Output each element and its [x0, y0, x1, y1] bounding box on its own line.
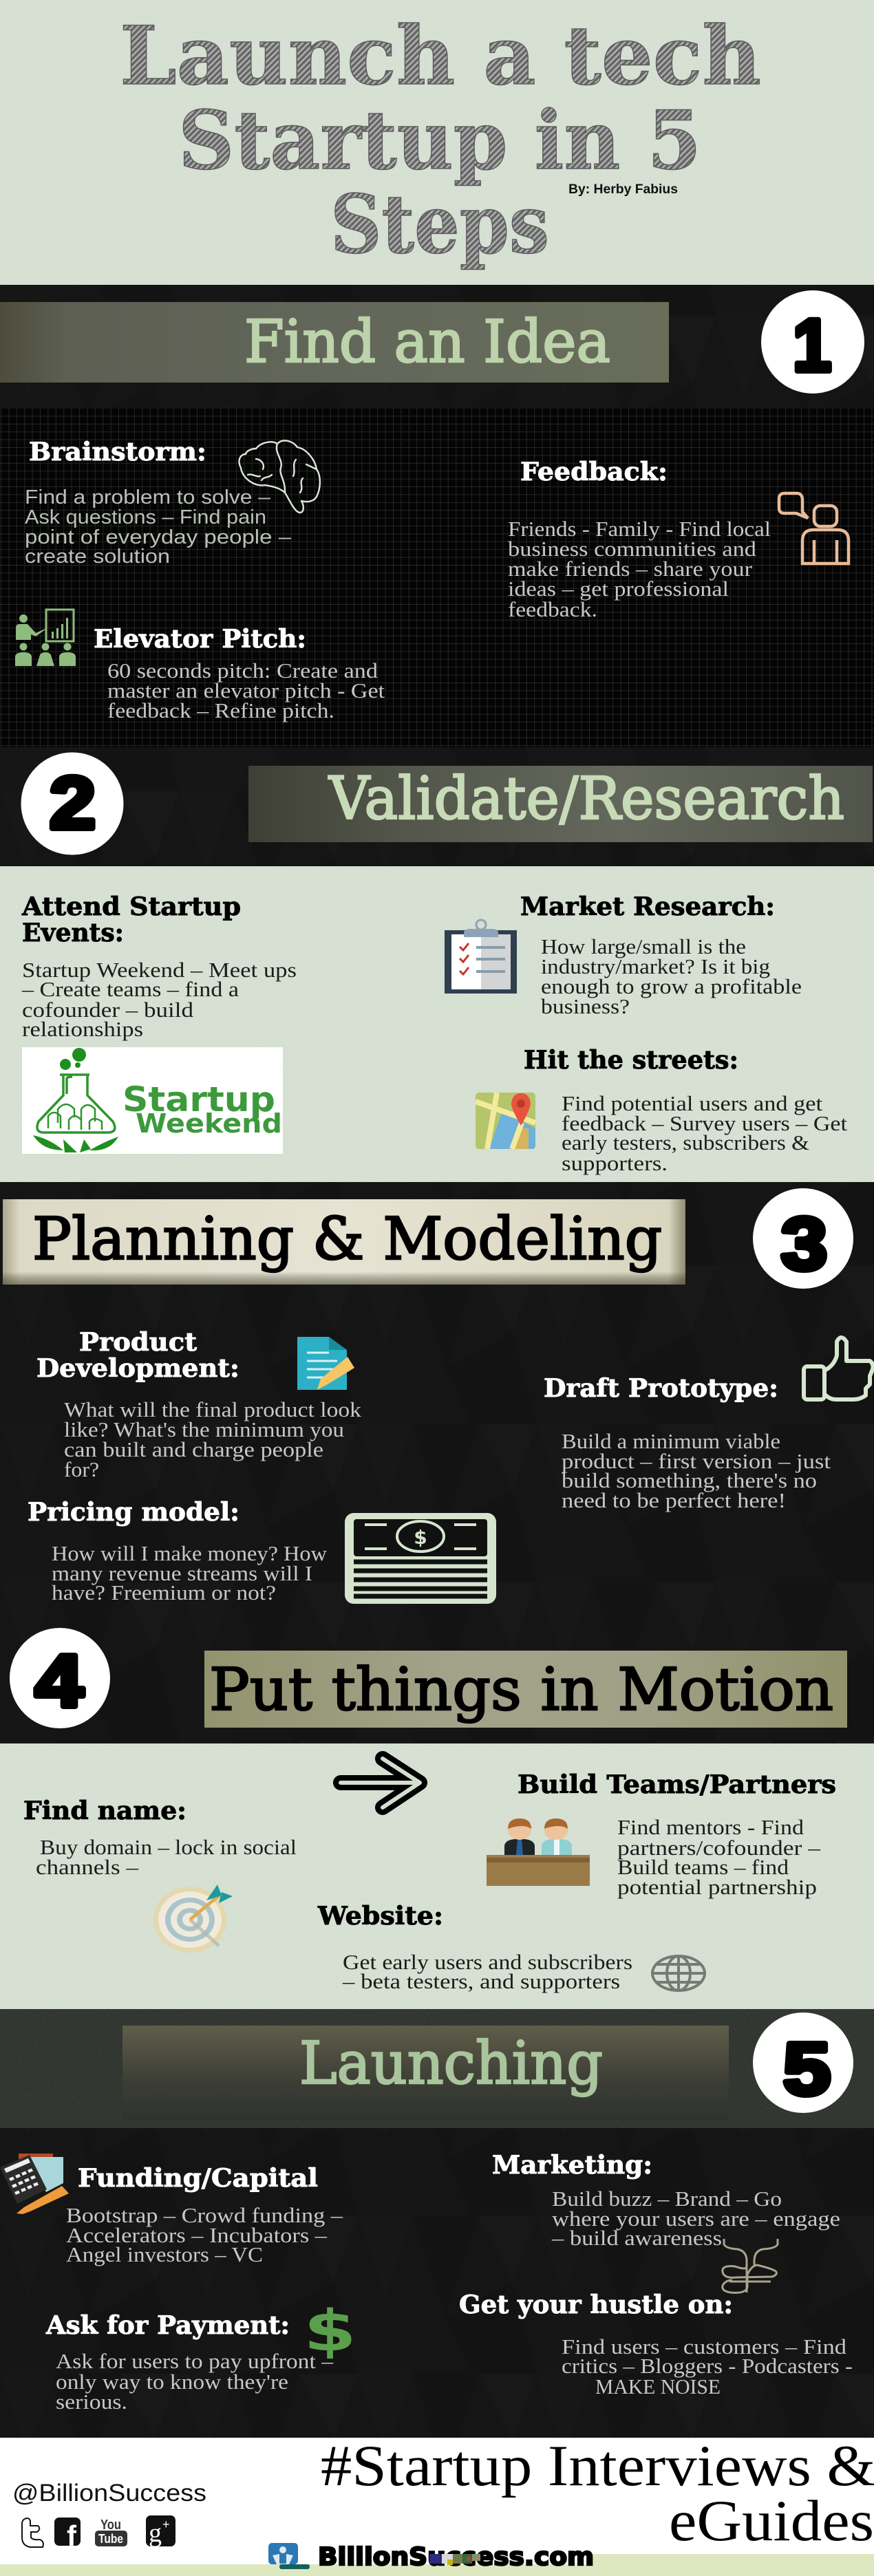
block: funding/capital: Bootstrap – Crowd funding –	[66, 2203, 343, 2227]
icon: facebook	[54, 2518, 81, 2552]
block: get your hustle on: critics – Bloggers - Podcasters -	[562, 2354, 853, 2378]
block: marketing	[492, 2151, 840, 2250]
icon: person with speech bubble	[779, 493, 849, 564]
banner: find an idea	[0, 302, 669, 383]
logo: billionsuccess.com: BillionSuccess.com	[318, 2543, 594, 2571]
icon: document with pencil	[297, 1337, 354, 1390]
title: Startup in 5	[178, 93, 701, 188]
block: find name: Buy domain – lock in social	[40, 1835, 297, 1859]
block: product development: Product	[79, 1328, 197, 1357]
icon: facebook: f	[67, 2520, 77, 2552]
block: feedback: ideas – get professional	[508, 577, 729, 601]
panel: footer	[0, 2434, 874, 2576]
icon: map pin	[476, 1093, 535, 1149]
block: find name	[23, 1796, 297, 1879]
block: pricing model: How will I make money? How	[52, 1541, 328, 1565]
icon: thumbs up	[804, 1338, 873, 1399]
block: attend startup events: Startup Weekend – Meet ups	[22, 958, 297, 982]
logo: startup weekend: Startup	[122, 1080, 275, 1119]
banner: validate/research: Validate/Research	[328, 765, 844, 833]
block: product development: can built and charge people	[64, 1437, 323, 1461]
block: funding/capital: Funding/Capital	[78, 2164, 318, 2193]
arrow	[341, 1759, 420, 1807]
title: Steps	[330, 177, 549, 272]
panel: step 1 header	[0, 285, 874, 409]
block: product development: Development:	[36, 1354, 239, 1383]
block: elevator pitch: Elevator Pitch:	[94, 625, 306, 654]
block: attend startup events: Attend Startup	[21, 892, 241, 921]
number badge 4	[10, 1628, 110, 1728]
panel: step 4 content	[0, 1743, 874, 2009]
block: marketing: Marketing:	[492, 2151, 652, 2180]
block: marketing: – build awareness	[551, 2226, 722, 2250]
panel: step 2 content	[0, 866, 874, 1182]
block: market research: How large/small is the	[541, 934, 746, 958]
block: feedback: feedback.	[508, 597, 597, 621]
block: funding/capital: Angel investors – VC	[66, 2242, 263, 2266]
block: find name: channels –	[36, 1855, 139, 1879]
block: website	[317, 1902, 632, 1993]
number badge 5	[753, 2012, 853, 2113]
icon: stack of money: $	[414, 1526, 427, 1549]
icon: tangled path	[723, 2239, 778, 2293]
block: draft prototype: product – first version – just	[562, 1449, 831, 1473]
block: market research: Market Research:	[520, 892, 775, 921]
block: brainstorm: Ask questions – Find pain	[25, 506, 266, 528]
banner: put things in motion: Put things in Motion	[209, 1656, 833, 1724]
block: hit the streets: early testers, subscribers &	[562, 1130, 809, 1155]
block: market research	[520, 892, 802, 1018]
icon: stack of money	[345, 1513, 496, 1604]
block: build teams/partners: Build teams – find	[617, 1855, 789, 1879]
block: find name: Find name:	[23, 1796, 186, 1825]
banner: launching	[122, 2026, 729, 2120]
block: ask for payment: Ask for Payment:	[45, 2311, 290, 2340]
block: feedback: make friends – share your	[508, 557, 753, 581]
number badge 1: 1	[793, 303, 831, 387]
block: brainstorm: Brainstorm:	[29, 438, 206, 466]
icon: twitter	[22, 2518, 43, 2547]
block: get your hustle on	[459, 2290, 853, 2398]
block: brainstorm	[25, 438, 292, 568]
number badge 1	[761, 290, 864, 394]
icon: globe	[652, 1956, 705, 1990]
block: product development: like? What's the minimum you	[64, 1417, 344, 1441]
block: website: Get early users and subscribers	[343, 1950, 632, 1974]
title	[120, 8, 761, 272]
block: draft prototype	[544, 1374, 831, 1512]
icon: youtube: You	[100, 2518, 121, 2533]
block: feedback: business communities and	[508, 537, 757, 561]
banner: find an idea: Find an Idea	[244, 308, 610, 376]
block: attend startup events: cofounder – build	[22, 998, 194, 1022]
icon: brain	[239, 440, 320, 513]
block: funding/capital: Accelerators – Incubators –	[66, 2223, 328, 2247]
panel: step 3 and step 4 header background	[0, 1182, 874, 1743]
block: market research: enough to grow a profitable	[541, 974, 802, 998]
icon: target with dart	[153, 1885, 233, 1953]
block: get your hustle on: MAKE NOISE	[595, 2374, 721, 2398]
number badge 3: 3	[781, 1202, 827, 1285]
block: feedback: Feedback:	[520, 458, 668, 486]
call to action	[321, 2434, 874, 2553]
block: hit the streets: feedback – Survey users – Get	[562, 1111, 847, 1135]
block: ask for payment	[45, 2311, 334, 2414]
icon: dollar sign: $	[303, 2299, 356, 2364]
block: ask for payment: Ask for users to pay upfront –	[56, 2349, 334, 2373]
block: brainstorm: Find a problem to solve –	[25, 486, 271, 508]
banner: launching: Launching	[299, 2030, 603, 2098]
icon: calculator and notebook	[0, 2154, 69, 2214]
block: feedback	[508, 458, 771, 621]
block: brainstorm: create solution	[25, 546, 170, 568]
number badge 3	[753, 1188, 853, 1289]
block: ask for payment: serious.	[56, 2390, 127, 2414]
icon: youtube: Tube	[98, 2532, 123, 2546]
panel: step 5 header	[0, 2009, 874, 2128]
call to action: #Startup Interviews &	[321, 2434, 874, 2498]
panel: title band	[0, 0, 874, 285]
title: Launch a tech	[120, 8, 761, 103]
block: pricing model	[28, 1498, 328, 1604]
block: build teams/partners: partners/cofounder –	[617, 1836, 821, 1860]
block: attend startup events	[21, 892, 297, 1041]
block: get your hustle on: Get your hustle on:	[459, 2290, 733, 2319]
block: product development	[36, 1328, 362, 1481]
number badge 5: 5	[783, 2027, 831, 2110]
icon: youtube	[95, 2518, 127, 2546]
icon: google plus: g	[149, 2519, 162, 2548]
block: hit the streets: Hit the streets:	[524, 1046, 738, 1075]
block: market research: business?	[541, 994, 630, 1018]
block: build teams/partners: Find mentors - Find	[617, 1815, 804, 1839]
block: pricing model: have? Freemium or not?	[52, 1580, 276, 1604]
social handle: @BillionSuccess	[12, 2480, 206, 2507]
panel: step 5 content	[0, 2128, 874, 2438]
block: draft prototype: need to be perfect here!	[562, 1488, 786, 1512]
block: build teams/partners: Build Teams/Partners	[518, 1770, 836, 1799]
block: elevator pitch: master an elevator pitch - Get	[107, 678, 385, 702]
icon: two people at desk	[487, 1818, 590, 1886]
block: get your hustle on: Find users – customers – Find	[562, 2334, 847, 2359]
logo: startup weekend: Weekend	[136, 1108, 282, 1139]
block: ask for payment: only way to know they're	[56, 2370, 288, 2394]
block: draft prototype: Draft Prototype:	[544, 1374, 778, 1403]
block: draft prototype: Build a minimum viable	[562, 1429, 780, 1453]
block: hit the streets	[524, 1046, 847, 1175]
block: website: Website:	[317, 1902, 443, 1931]
block: attend startup events: Events:	[22, 919, 124, 947]
block: attend startup events: relationships	[22, 1017, 143, 1041]
block: brainstorm: point of everyday people –	[25, 526, 292, 548]
number badge 4: 4	[35, 1639, 83, 1722]
block: product development: for?	[64, 1457, 99, 1481]
block: funding/capital	[66, 2164, 343, 2266]
block: draft prototype: build something, there's no	[562, 1468, 817, 1492]
block: build teams/partners	[518, 1770, 836, 1899]
block: attend startup events: – Create teams – find a	[21, 977, 239, 1001]
icon: presenter with audience	[15, 610, 76, 666]
byline: By: Herby Fabius	[568, 182, 678, 197]
logo: startup weekend	[22, 1047, 283, 1154]
block: marketing: Build buzz – Brand – Go	[552, 2187, 782, 2211]
block: website: – beta testers, and supporters	[342, 1969, 620, 1993]
banner: planning and modeling: Planning & Modeling	[32, 1205, 662, 1274]
icon: google plus	[146, 2515, 175, 2548]
block: pricing model: Pricing model:	[28, 1498, 239, 1527]
block: feedback: Friends - Family - Find local	[508, 517, 771, 541]
block: build teams/partners: potential partnership	[617, 1875, 817, 1899]
block: marketing: where your users are – engage	[552, 2207, 840, 2231]
block: elevator pitch	[94, 625, 385, 722]
block: product development: What will the final product look	[64, 1397, 362, 1421]
block: hit the streets: Find potential users and get	[562, 1091, 822, 1115]
block: hit the streets: supporters.	[562, 1151, 668, 1175]
block: pricing model: many revenue streams will I	[52, 1561, 312, 1585]
call to action: eGuides	[669, 2489, 874, 2553]
panel: step 1 content	[0, 409, 874, 747]
panel: step 2 header	[0, 747, 874, 866]
number badge 2	[21, 753, 124, 855]
number badge 2: 2	[50, 761, 96, 844]
icon: clipboard	[445, 920, 517, 994]
block: elevator pitch: 60 seconds pitch: Create and	[107, 658, 379, 683]
block: market research: industry/market? Is it big	[541, 954, 770, 978]
icon: google plus: +	[162, 2518, 170, 2531]
block: elevator pitch: feedback – Refine pitch.	[107, 698, 334, 722]
